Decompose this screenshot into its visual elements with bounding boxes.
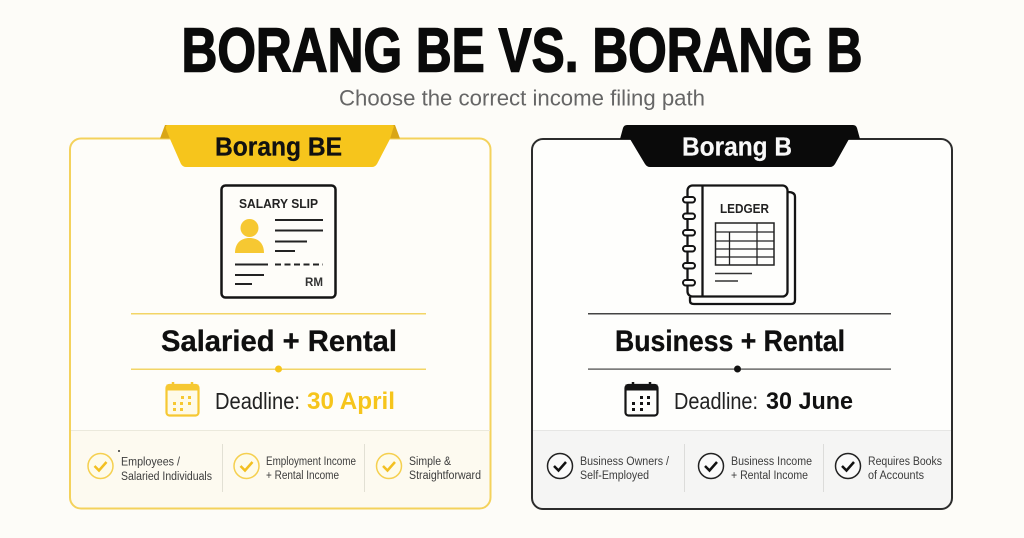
panel: Borang B <box>532 125 952 509</box>
divider <box>684 444 685 492</box>
divider top <box>131 313 426 314</box>
feature: employees: Employees / <box>121 456 181 468</box>
features strip background <box>70 430 490 508</box>
ribbon: Borang B: Borang B <box>682 134 792 162</box>
subtitle: Choose the correct income filing path <box>339 86 705 110</box>
card background <box>532 139 952 509</box>
deadline date: 30 April <box>307 388 395 415</box>
feature: business owners: Business Owners / <box>580 456 670 468</box>
panel: Borang BE <box>70 125 490 508</box>
feature: books of accounts: Requires Books <box>868 456 942 468</box>
feature: business income <box>698 454 812 482</box>
icon: salary slip <box>222 186 336 298</box>
feature: books of accounts <box>836 454 942 482</box>
deadline label: Deadline: <box>674 388 758 414</box>
card background <box>70 138 490 508</box>
card border <box>70 138 490 508</box>
card border <box>532 139 952 509</box>
feature: simple <box>376 454 481 482</box>
feature: simple: Simple & <box>409 456 451 468</box>
divider with dot <box>131 366 426 372</box>
ribbon: Borang BE <box>160 125 400 167</box>
feature: employment income: Employment Income <box>266 456 356 468</box>
ribbon: Borang BE: Borang BE <box>215 134 342 162</box>
divider top <box>588 313 891 314</box>
heading: Business + Rental: Business + Rental <box>615 325 845 358</box>
icon: salary slip: RM <box>305 275 323 289</box>
title: BORANG BE VS. BORANG B <box>182 16 862 85</box>
feature: simple: Straightforward <box>409 470 481 482</box>
feature: employees: Salaried Individuals <box>121 471 212 483</box>
feature: business income: + Rental Income <box>731 470 808 482</box>
deadline label: Deadline: <box>215 388 300 414</box>
feature: employment income: + Rental Income <box>266 470 339 482</box>
icon: ledger: LEDGER <box>720 202 769 216</box>
feature: employment income <box>234 454 356 482</box>
feature: business owners <box>548 454 670 482</box>
icon: ledger <box>683 186 795 304</box>
ribbon: Borang B <box>620 125 860 167</box>
feature: employees <box>88 450 212 483</box>
feature: business owners: Self-Employed <box>580 470 649 482</box>
features strip top line <box>533 430 951 431</box>
divider <box>364 444 365 492</box>
icon: calendar <box>626 382 658 416</box>
features strip background <box>532 430 952 509</box>
feature: business income: Business Income <box>731 456 812 468</box>
divider <box>823 444 824 492</box>
icon: calendar <box>166 382 198 416</box>
deadline date: 30 June <box>766 388 853 415</box>
icon: salary slip: SALARY SLIP <box>239 197 318 211</box>
divider with dot <box>588 366 891 372</box>
feature: books of accounts: of Accounts <box>868 470 924 482</box>
divider <box>222 444 223 492</box>
heading: Salaried + Rental: Salaried + Rental <box>161 325 397 358</box>
features strip top line <box>71 430 490 431</box>
